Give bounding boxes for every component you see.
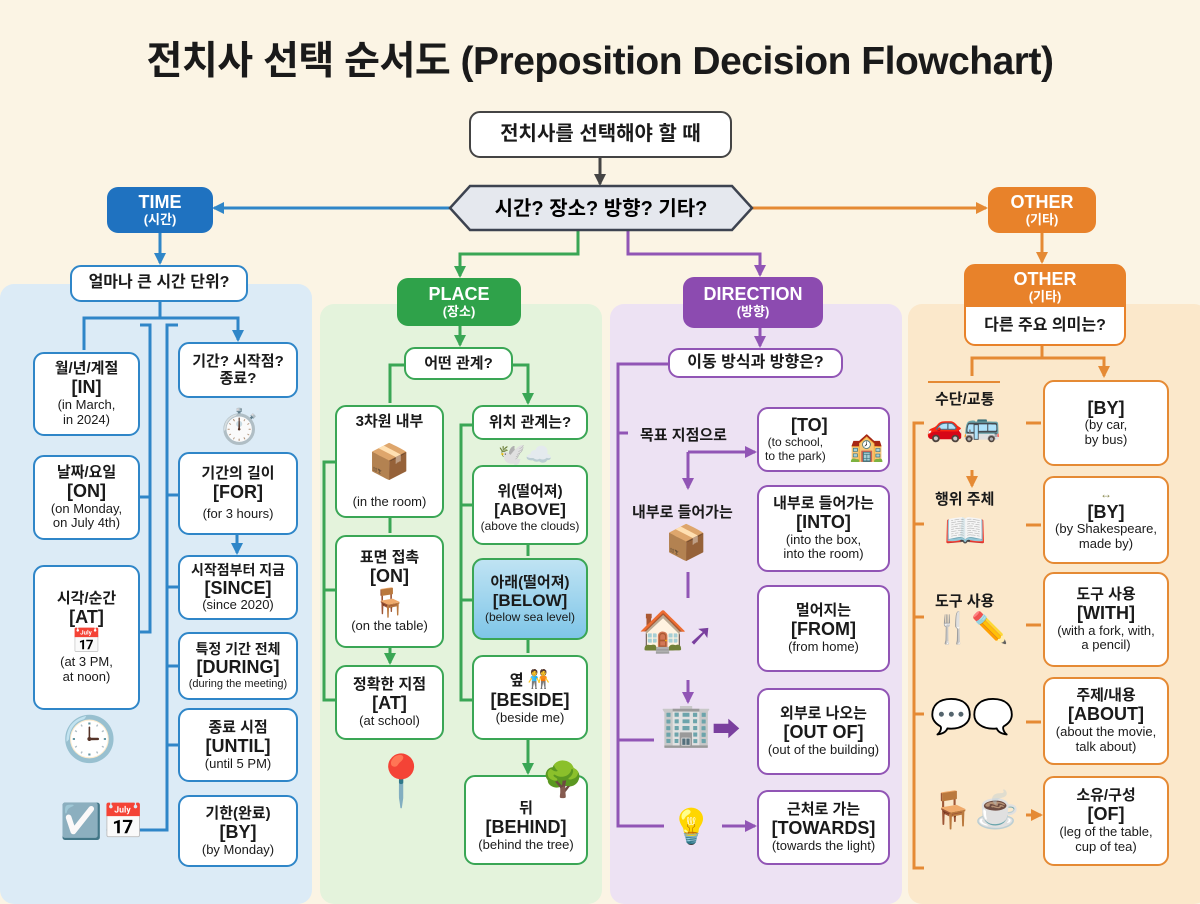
3D inside: (in the room) <box>353 494 426 509</box>
SINCE: [SINCE] <box>204 578 272 598</box>
BY time <box>178 795 298 867</box>
icon: light bulb: 💡 <box>670 808 712 846</box>
UNTIL: 종료 시점 <box>208 719 268 736</box>
BELOW <box>472 558 588 640</box>
IN: [IN] <box>72 377 102 397</box>
TO: to the park) <box>765 449 826 463</box>
WITH: a pencil) <box>1081 637 1131 652</box>
label: goal: 목표 지점으로 <box>640 427 727 444</box>
header: OTHER: (기타) <box>1029 289 1061 304</box>
ABOUT: (about the movie, <box>1056 724 1156 739</box>
ON <box>33 455 140 540</box>
FOR: [FOR] <box>213 482 263 502</box>
OUT OF: [OUT OF] <box>784 722 863 742</box>
icon: book: 📖 <box>944 512 986 550</box>
WITH <box>1043 572 1169 667</box>
ABOUT: 주제/내용 <box>1076 687 1136 704</box>
AT: at noon) <box>63 669 110 684</box>
icon: bird cloud: 🕊️☁️ <box>498 442 553 467</box>
FOR: 기간의 길이 <box>201 465 275 482</box>
BY transport: by bus) <box>1085 432 1127 447</box>
3D inside: 📦 <box>368 443 411 481</box>
question duration <box>178 342 298 398</box>
time question: 얼마나 큰 시간 단위? <box>89 274 229 291</box>
label: agent: 행위 주체 <box>935 491 994 508</box>
OF: cup of tea) <box>1075 839 1137 854</box>
ABOUT: [ABOUT] <box>1068 704 1144 724</box>
surface ON: 🪑 <box>372 587 407 618</box>
TO: (to school, <box>768 435 823 449</box>
AT point: 정확한 지점 <box>353 676 426 693</box>
INTO: 내부로 들어가는 <box>773 495 874 512</box>
surface ON <box>335 535 444 648</box>
TOWARDS <box>757 790 890 865</box>
icon: building out: 🏢➡ <box>660 701 740 748</box>
BESIDE: [BESIDE] <box>490 690 570 710</box>
UNTIL <box>178 708 298 782</box>
INTO: into the room) <box>783 546 864 561</box>
ABOUT: talk about) <box>1076 739 1136 754</box>
SINCE: 시작점부터 지금 <box>191 562 285 578</box>
BY agent: ↔ <box>1100 487 1112 501</box>
TOWARDS: 근처로 가는 <box>787 801 860 818</box>
BESIDE <box>472 655 588 740</box>
ON: [ON] <box>67 481 106 501</box>
INTO <box>757 485 890 572</box>
header: DIRECTION <box>683 277 823 328</box>
icon: fork pencil: 🍴✏️ <box>934 612 1009 645</box>
BEHIND: 🌳 <box>542 761 584 799</box>
label: transport: 수단/교통 <box>935 391 994 408</box>
WITH: [WITH] <box>1077 603 1135 623</box>
panel: place <box>335 278 588 865</box>
icon: speech bubbles: 💬🗨️ <box>930 698 1015 736</box>
icon: table cup: 🪑☕ <box>930 789 1020 830</box>
OUT OF <box>757 688 890 775</box>
header: OTHER top <box>988 187 1096 233</box>
BY agent: [BY] <box>1088 502 1124 522</box>
other question <box>966 307 1124 344</box>
WITH: (with a fork, with, <box>1057 623 1155 638</box>
header: TIME <box>107 187 213 233</box>
AT: 시각/순간 <box>57 590 116 607</box>
place question <box>404 347 513 380</box>
FROM: 멀어지는 <box>796 602 851 619</box>
position question: 위치 관계는? <box>489 414 571 431</box>
ON: on July 4th) <box>53 515 120 530</box>
FROM <box>757 585 890 672</box>
decision hexagon <box>448 184 754 232</box>
question duration: 기간? 시작점? <box>192 353 284 370</box>
icon: map pin: 📍 <box>370 753 432 809</box>
FOR: (for 3 hours) <box>203 506 273 521</box>
BESIDE: (beside me) <box>496 710 564 725</box>
TO <box>757 407 890 472</box>
ABOVE: 위(떨어져) <box>497 483 563 500</box>
header: PLACE: PLACE <box>428 284 490 304</box>
BY transport <box>1043 380 1169 466</box>
AT: [AT] <box>69 607 104 627</box>
OF: [OF] <box>1088 804 1124 824</box>
BELOW: [BELOW] <box>493 591 567 610</box>
IN: in 2024) <box>63 412 110 427</box>
IN: 월/년/계절 <box>55 360 118 377</box>
label: tool: 도구 사용 <box>935 593 994 610</box>
TO: [TO] <box>791 415 828 435</box>
OUT OF: (out of the building) <box>768 742 879 757</box>
FROM: (from home) <box>788 639 859 654</box>
DURING: 특정 기간 전체 <box>195 641 281 657</box>
BESIDE: 옆 🧑‍🤝‍🧑 <box>510 669 550 689</box>
AT: 📅 <box>72 628 101 655</box>
question duration: 종료? <box>220 370 256 387</box>
BY time: 기한(완료) <box>205 805 271 822</box>
AT point <box>335 665 444 740</box>
ABOVE: [ABOVE] <box>494 500 566 519</box>
BY time: [BY] <box>220 822 256 842</box>
icon: box into: 📦 <box>665 524 707 562</box>
INTO: [INTO] <box>796 512 851 532</box>
AT point: [AT] <box>372 693 407 713</box>
IN: (in March, <box>58 397 115 412</box>
header: OTHER top: OTHER <box>1010 192 1074 212</box>
OF: (leg of the table, <box>1059 824 1153 839</box>
header: OTHER: OTHER <box>1014 269 1076 289</box>
ON: (on Monday, <box>51 501 122 516</box>
start box: 전치사를 선택해야 할 때 <box>500 123 701 145</box>
TO: 🏫 <box>849 431 884 462</box>
icon: stopwatch: ⏱️ <box>218 408 260 446</box>
BEHIND: (behind the tree) <box>478 836 574 852</box>
AT <box>33 565 140 710</box>
panel: time <box>33 265 298 867</box>
ABOVE <box>472 465 588 545</box>
direction question: 이동 방식과 방향은? <box>687 354 824 371</box>
ABOVE: (above the clouds) <box>481 518 579 532</box>
header: TIME: TIME <box>138 192 182 212</box>
BEHIND <box>464 775 588 865</box>
header: DIRECTION: (방향) <box>737 304 769 319</box>
icon: calendar check: ☑️📅 <box>60 803 145 841</box>
TOWARDS: [TOWARDS] <box>772 818 875 838</box>
header: TIME: (시간) <box>144 212 176 227</box>
SINCE: (since 2020) <box>202 597 274 612</box>
header: PLACE: (장소) <box>443 304 475 319</box>
header: DIRECTION: DIRECTION <box>704 284 802 304</box>
OUT OF: 외부로 나오는 <box>780 705 867 722</box>
FROM: [FROM] <box>791 619 856 639</box>
icon: car bus: 🚗🚌 <box>926 410 1001 443</box>
UNTIL: [UNTIL] <box>206 736 270 756</box>
OF <box>1043 776 1169 866</box>
BY transport: [BY] <box>1088 398 1124 418</box>
icon: clock: 🕒 <box>62 715 117 764</box>
header: OTHER top: (기타) <box>1026 212 1058 227</box>
TOWARDS: (towards the light) <box>772 838 875 853</box>
start box <box>469 111 732 158</box>
place question: 어떤 관계? <box>424 355 493 372</box>
surface ON: (on the table) <box>351 618 428 633</box>
DURING <box>178 632 298 700</box>
label: into: 내부로 들어가는 <box>632 504 733 521</box>
ABOUT <box>1043 677 1169 765</box>
BY transport: (by car, <box>1085 417 1127 432</box>
INTO: (into the box, <box>786 532 861 547</box>
IN <box>33 352 140 436</box>
FOR <box>178 452 298 535</box>
time question <box>70 265 248 302</box>
BY agent: made by) <box>1079 536 1133 551</box>
icon: house leave: 🏠➚ <box>638 610 713 654</box>
panel: direction <box>632 277 890 865</box>
SINCE <box>178 555 298 620</box>
header: OTHER <box>964 264 1126 346</box>
DURING: [DURING] <box>196 657 280 677</box>
DURING: (during the meeting) <box>189 678 287 690</box>
title: 전치사 선택 순서도 (Preposition Decision Flowchart) <box>147 40 1053 83</box>
AT point: (at school) <box>359 713 420 728</box>
BY agent: (by Shakespeare, <box>1055 521 1157 536</box>
surface ON: [ON] <box>370 566 409 586</box>
WITH: 도구 사용 <box>1076 586 1136 603</box>
BEHIND: 뒤 <box>519 800 533 817</box>
AT: (at 3 PM, <box>60 654 113 669</box>
decision hexagon: 시간? 장소? 방향? 기타? <box>495 197 707 220</box>
BELOW: 아래(떨어져) <box>490 574 570 591</box>
3D inside <box>335 405 444 518</box>
ON: 날짜/요일 <box>57 464 116 481</box>
panel: other <box>926 264 1169 866</box>
3D inside: 3차원 내부 <box>356 413 423 430</box>
OF: 소유/구성 <box>1076 787 1136 804</box>
direction question <box>668 348 843 378</box>
BELOW: (below sea level) <box>485 610 575 624</box>
position question <box>472 405 588 440</box>
header: PLACE <box>397 278 521 326</box>
UNTIL: (until 5 PM) <box>205 756 271 770</box>
surface ON: 표면 접촉 <box>360 549 419 566</box>
BEHIND: [BEHIND] <box>486 817 566 837</box>
BY agent <box>1043 476 1169 564</box>
BY time: (by Monday) <box>202 842 274 856</box>
other question: 다른 주요 의미는? <box>984 317 1106 334</box>
